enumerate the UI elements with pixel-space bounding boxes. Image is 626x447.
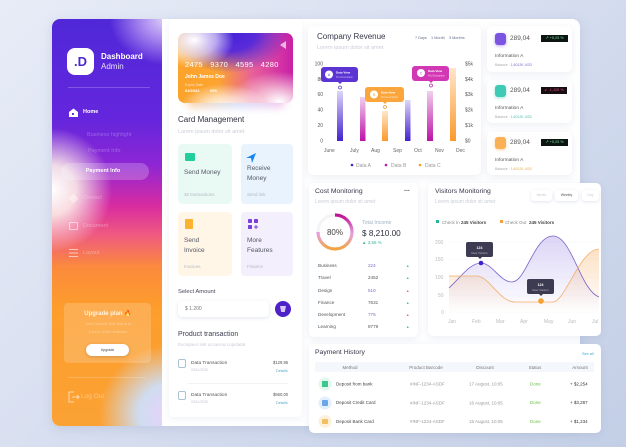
transaction row one xyxy=(178,359,288,373)
date: 03/11/2020 xyxy=(191,368,208,372)
bar chart: revenue: June xyxy=(324,148,335,154)
caption: Finance xyxy=(247,264,263,269)
legend: Check In xyxy=(442,220,460,225)
table text: Deposit from bank xyxy=(336,382,373,386)
icon: teal tile xyxy=(495,85,506,97)
amount input xyxy=(178,301,269,317)
heading: Payment History xyxy=(315,349,365,356)
info card three xyxy=(487,132,572,175)
chip: day: Day xyxy=(587,193,594,197)
label: Information A xyxy=(495,158,523,163)
value: 289,04 xyxy=(510,139,530,146)
icon: contact xyxy=(69,194,78,203)
nav: contact: Contact xyxy=(83,195,102,201)
credit card shadow xyxy=(186,92,286,108)
upgrade text line two: Lorem of the features xyxy=(89,329,127,334)
bar chart: revenue: Data B xyxy=(391,163,407,169)
tile: send invoice xyxy=(178,212,232,276)
cvv value: 999 xyxy=(210,88,217,93)
line chart: visitors: 100 xyxy=(435,275,444,281)
icon: receipt xyxy=(178,359,186,368)
table rows: Development xyxy=(318,312,346,317)
bar chart: revenue: 40 xyxy=(317,108,323,114)
card holder: John James Doe xyxy=(185,74,225,80)
info card two xyxy=(487,80,572,123)
bar chart: revenue: $4k xyxy=(465,77,474,83)
table rows: ▲ xyxy=(406,276,409,280)
icon: purple tile xyxy=(495,33,506,45)
legend: Check Out xyxy=(505,220,527,225)
table text: Product Barcode xyxy=(409,365,443,370)
subheading: Lorem ipsum dolor sit amet xyxy=(178,129,244,135)
table text: Deposit Bank Card xyxy=(336,419,374,424)
table rows: Design xyxy=(318,288,333,293)
bar chart: revenue: $0 xyxy=(465,138,471,144)
total income value: $ 8,210.00 xyxy=(362,229,401,238)
caption: Send link xyxy=(247,192,266,197)
table rows: ▲ xyxy=(406,264,409,268)
heading: company revenue: Company Revenue xyxy=(317,32,385,41)
line chart: visitors: 50 xyxy=(438,293,444,299)
details link: Details xyxy=(276,369,288,373)
change badge xyxy=(541,87,567,94)
icon: invoice xyxy=(185,219,193,229)
tile: more features xyxy=(241,212,293,276)
bar chart: revenue: Data View xyxy=(381,90,396,94)
icon: receipt xyxy=(178,391,186,400)
label: Send xyxy=(184,237,199,244)
upgrade title: Upgrade plan 🔥 xyxy=(84,311,132,317)
chip: weekly: Weekly xyxy=(561,193,572,197)
panel: payment history xyxy=(309,344,601,433)
panel: visitors monitoring xyxy=(428,183,601,336)
heading: product transaction: Product transaction xyxy=(178,331,238,338)
heading: Visitors Monitoring xyxy=(435,188,491,195)
icon: home xyxy=(69,108,78,117)
label xyxy=(247,165,270,182)
label xyxy=(184,237,205,254)
line chart: visitors: New Visitors xyxy=(532,288,549,292)
label: Information A xyxy=(495,106,523,111)
table text: Method xyxy=(342,365,358,370)
value: 289,04 xyxy=(510,87,530,94)
icon: orange tile xyxy=(495,137,506,149)
amount: $129,95 xyxy=(273,360,288,365)
panel: card management xyxy=(169,19,302,417)
table text: Status xyxy=(529,365,542,370)
upgrade button xyxy=(86,344,129,356)
name: Data Transaction xyxy=(191,393,227,398)
bar chart: revenue: 0 xyxy=(320,138,323,144)
panel: cost monitoring xyxy=(309,183,418,337)
label: Send Money xyxy=(184,169,220,176)
table text: Done xyxy=(530,400,541,405)
details link: Details xyxy=(276,401,288,405)
logo tile: .D xyxy=(74,54,87,69)
heading: card management: Card Management xyxy=(178,115,244,124)
line chart: visitors: Jan xyxy=(448,319,456,325)
table header xyxy=(315,362,594,372)
change badge: ↙ -1,125 % xyxy=(544,88,564,92)
table rows: ▲ xyxy=(406,313,409,317)
table rows: ▲ xyxy=(406,301,409,305)
nav: layout: Layout xyxy=(83,250,100,256)
icon: contactless xyxy=(280,41,286,49)
table rows: Learning xyxy=(318,324,336,329)
line chart: visitors: Feb xyxy=(472,319,481,325)
change badge xyxy=(541,35,568,42)
bar chart: revenue: Aug xyxy=(371,148,380,154)
date: 03/11/2020 xyxy=(191,400,208,404)
change badge: ↗ +5,25 % xyxy=(545,140,564,144)
brand name: Dashboard xyxy=(101,52,143,61)
change badge xyxy=(541,139,568,146)
chip: monthly xyxy=(531,190,552,201)
table text: + $1,234 xyxy=(570,419,588,424)
bar chart: revenue: Nov xyxy=(435,148,444,154)
upgrade text: Don't trouble that feel and xyxy=(85,321,131,326)
bar chart: revenue: 60 xyxy=(317,92,323,98)
change: ▲ 3,56 % xyxy=(362,240,382,245)
legend xyxy=(436,220,555,225)
nav: payment info: Payment Info xyxy=(88,148,120,154)
bar chart: revenue: A xyxy=(328,73,331,77)
table rows: Travel xyxy=(318,275,331,280)
tile: receive money xyxy=(241,144,293,204)
heading: Cost Monitoring xyxy=(315,188,363,195)
table text xyxy=(318,365,589,428)
label: Features xyxy=(247,246,273,254)
line chart: visitors: May xyxy=(544,319,554,325)
brand role: Admin xyxy=(101,62,124,71)
table text: 17 August, 10:05 xyxy=(469,382,503,386)
label: Money xyxy=(247,174,267,182)
time range chips: 7 Days 1 Month 3 Months xyxy=(415,36,465,40)
change badge: ↗ +5,25 % xyxy=(545,36,564,40)
bar chart: revenue: Data C xyxy=(425,163,441,169)
card number: 2475 9370 4595 4280 xyxy=(185,60,279,69)
subheading: Lorem ipsum dolor sit amet xyxy=(315,199,375,205)
nav: active pill xyxy=(61,163,149,180)
bar chart: revenue: 100 xyxy=(315,62,323,68)
credit card xyxy=(178,33,293,103)
cart button xyxy=(275,301,291,317)
donut chart: 80% xyxy=(316,213,354,251)
legend: 245 Visitors xyxy=(529,220,555,225)
bar chart: revenue: Put Description xyxy=(428,74,446,78)
line chart: visitors: 150 xyxy=(435,257,444,263)
bar chart: revenue: $1k xyxy=(465,123,474,129)
balance: Balance : 1,6012K USD xyxy=(495,63,532,67)
table text: Done xyxy=(530,382,541,386)
expiry value: 04/2032 xyxy=(185,88,199,93)
icon: layout xyxy=(69,249,78,257)
total income label: Total Income xyxy=(362,220,391,226)
line chart: visitors: New Visitors xyxy=(471,251,488,255)
see all link: See all xyxy=(582,352,594,356)
legend: 245 Visitors xyxy=(461,220,487,225)
tile: send money xyxy=(178,144,232,204)
table text: 16 August, 10:05 xyxy=(469,400,503,406)
bar chart: revenue: 20 xyxy=(317,123,323,129)
bar chart: revenue: Data View xyxy=(336,70,351,74)
line chart: visitors: 200 xyxy=(435,240,444,246)
logo tile xyxy=(67,48,94,75)
heading: select amount: Select Amount xyxy=(178,289,215,295)
sidebar xyxy=(52,19,162,426)
label: Receive xyxy=(247,165,270,172)
nav: log out: Log Out xyxy=(81,393,104,400)
bar chart: revenue: C xyxy=(420,72,423,76)
table text: 15 August, 10:05 xyxy=(469,419,503,424)
amount: $560,00 xyxy=(273,392,288,397)
line chart: visitors: 124 xyxy=(477,246,482,250)
bar chart: revenue: Data A xyxy=(356,163,372,169)
table rows: 7631 xyxy=(368,300,379,305)
table rows: ▲ xyxy=(406,289,409,293)
table rows: Business xyxy=(318,263,337,268)
nav: document: Document xyxy=(83,223,108,229)
table text: + $2,254 xyxy=(570,382,588,386)
table rows: 510 xyxy=(368,288,376,293)
table rows: 8779 xyxy=(368,324,379,329)
bar chart: revenue: July xyxy=(350,148,359,154)
upgrade button: Upgrade xyxy=(101,348,114,352)
icon: log out xyxy=(68,392,80,402)
bar chart: revenue: 80 xyxy=(317,77,323,83)
transaction row two xyxy=(178,391,288,405)
bar chart: revenue: $5k xyxy=(465,62,474,68)
info card one xyxy=(487,26,572,72)
nav: home: Home xyxy=(83,109,98,115)
expiry label: Expiry Date xyxy=(185,83,203,87)
upgrade box xyxy=(64,303,151,363)
name: Data Transaction xyxy=(191,361,227,366)
table text: Amount xyxy=(572,365,589,370)
bar chart: revenue: Put Description xyxy=(336,76,354,79)
table rows xyxy=(318,263,409,329)
caption: Invoices xyxy=(184,264,201,269)
table text: Deposit Credit Card xyxy=(336,400,376,405)
table rows: 2452 xyxy=(368,275,379,280)
bar chart: revenue: Dec xyxy=(456,148,465,154)
icon: document xyxy=(69,222,78,230)
balance: Balance : 1,6012K USD xyxy=(495,115,532,119)
balance: Balance : 1,6012K USD xyxy=(495,167,532,171)
line chart: visitors: 124 xyxy=(538,283,543,287)
table text: + $3,287 xyxy=(570,400,588,405)
chip: monthly: Month xyxy=(537,193,546,197)
bar chart: revenue: Sep xyxy=(393,148,402,154)
line chart: visitors: Jul xyxy=(592,319,598,325)
line chart: visitors: Jun xyxy=(568,319,576,325)
subheading: Lorem ipsum dolor sit amet xyxy=(435,199,495,205)
menu dots: ... xyxy=(404,186,410,193)
bar chart: revenue: Put Description xyxy=(381,96,399,99)
icon: money xyxy=(185,153,195,161)
panel: company revenue xyxy=(308,26,481,175)
donut chart: 80%: 80% xyxy=(327,228,343,237)
bar chart: revenue: $2k xyxy=(465,108,474,114)
nav: active pill: Payment Info xyxy=(86,168,120,174)
bar chart: revenue: B xyxy=(373,93,376,97)
table text: Discount xyxy=(476,365,494,370)
line chart: visitors: Apr xyxy=(520,319,528,325)
line chart: visitors: Mar xyxy=(496,319,505,325)
chip: weekly xyxy=(555,190,578,201)
bar chart: revenue: $3k xyxy=(465,92,474,98)
bar chart: revenue: Data View xyxy=(428,69,443,73)
label: Information A xyxy=(495,54,523,59)
caption: 36 transactions xyxy=(184,192,215,197)
table text: #INF-1234-ASDF xyxy=(410,400,445,406)
subheading: Excepteur sint occaecat cupidatat xyxy=(178,342,245,347)
table rows: 224 xyxy=(368,263,376,268)
icon: grid xyxy=(248,219,258,229)
icon: navigation arrow xyxy=(246,153,256,163)
amount input: $ 1.200 xyxy=(185,306,202,312)
table text: #INF-1234-ASDF xyxy=(410,382,445,386)
table text: #INF-1234-ASDF xyxy=(410,419,445,424)
line chart: visitors: 0 xyxy=(441,310,444,316)
subheading: Lorem ipsum dolor sit amet xyxy=(317,45,383,51)
value: 289,04 xyxy=(510,35,530,42)
label xyxy=(247,237,273,254)
nav: business highlight: Business highlight xyxy=(87,132,131,138)
label: Invoice xyxy=(184,246,205,254)
table rows: Finance xyxy=(318,300,335,305)
chip: day xyxy=(582,190,599,201)
table rows: 775 xyxy=(368,312,376,317)
label: More xyxy=(247,237,262,244)
table rows: ▲ xyxy=(406,325,409,329)
main white panel xyxy=(52,19,580,426)
bar chart: revenue: Oct xyxy=(414,148,422,154)
table text: Done xyxy=(530,419,541,424)
